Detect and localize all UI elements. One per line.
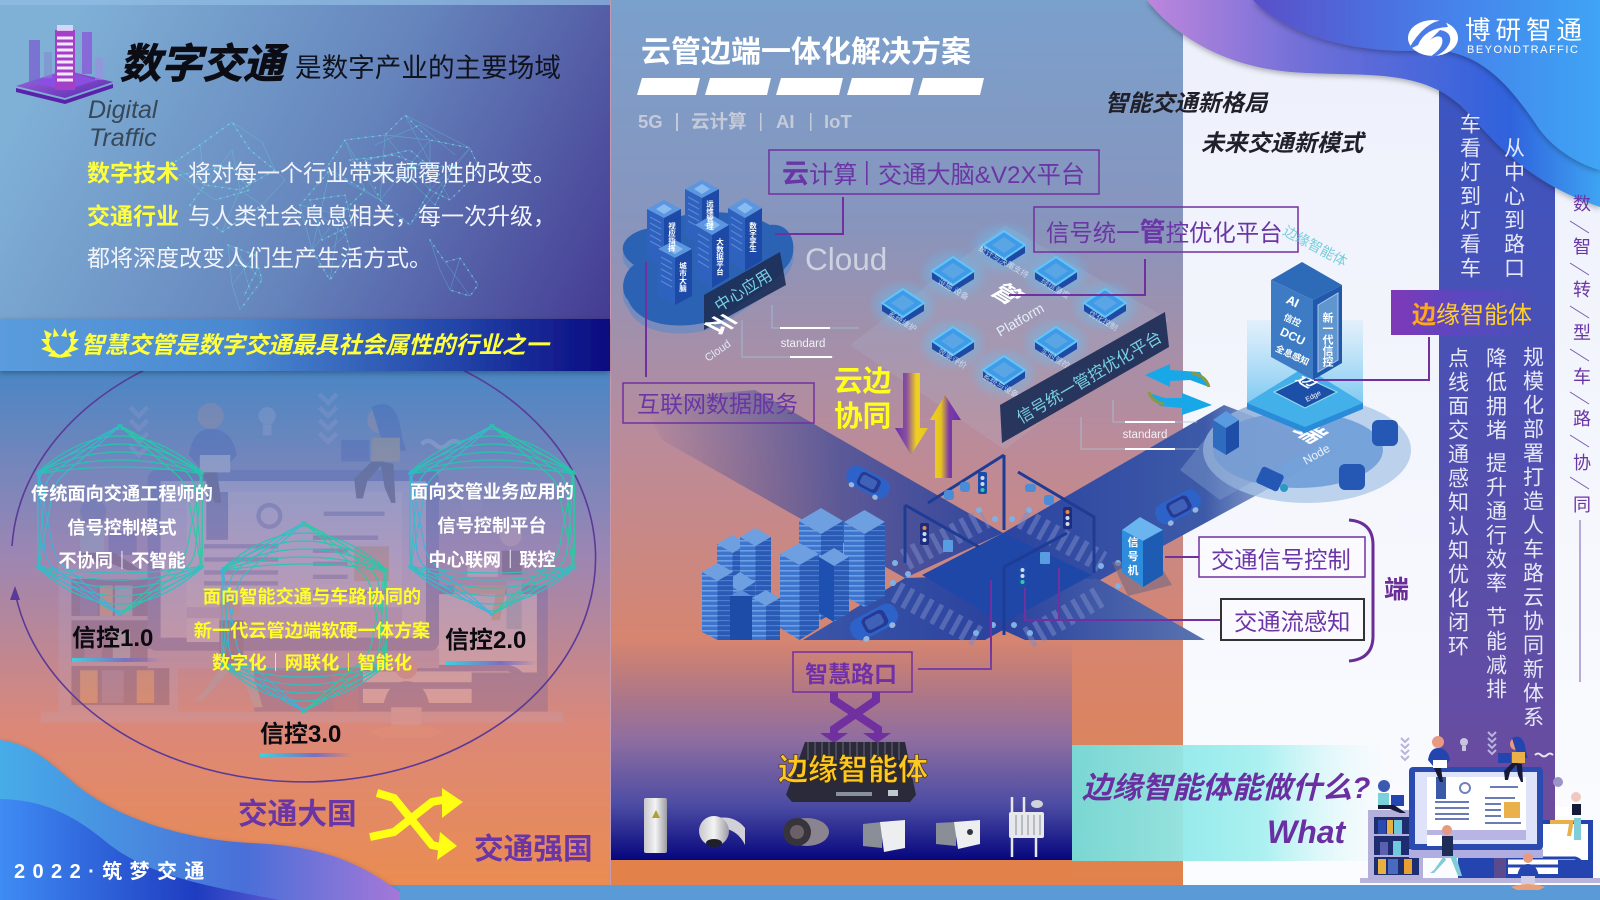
standard link 1: standard	[781, 338, 825, 350]
panel: edge hardware	[611, 640, 1072, 860]
cloud group: 运维管理	[705, 200, 714, 230]
box: cloud computing: 云计算	[782, 159, 857, 189]
platform layer: 绿信量度	[1039, 276, 1072, 301]
standard link 2: standard	[1123, 429, 1167, 441]
label: edge agent: 边缘智能体	[1412, 302, 1532, 329]
person right	[1550, 792, 1581, 840]
person top right	[1498, 737, 1528, 782]
english subtitle: Traffic	[89, 124, 157, 152]
center app panel	[704, 252, 786, 330]
evolution cycle arrow	[10, 334, 596, 782]
stage 2 text: 中心联网｜联控	[428, 549, 556, 570]
heading: cloud-edge solution	[637, 36, 984, 132]
edge box: 边缘智能体	[778, 754, 928, 787]
platform layer: 效果评价	[936, 346, 969, 371]
standard link 1	[742, 305, 859, 357]
logo text: 博研智通	[1465, 17, 1587, 45]
panel: strategy column	[1439, 60, 1555, 824]
person walking	[1427, 825, 1462, 876]
chip plate	[1247, 367, 1363, 433]
hex rings	[0, 402, 613, 735]
logo: BEYONDTRAFFIC	[1467, 44, 1579, 56]
side text: digital transformation: 转	[1573, 280, 1591, 300]
cycle arrows	[1145, 364, 1212, 415]
teal question banner	[1072, 745, 1392, 861]
stage 1 text: 传统面向交通工程师的	[31, 483, 213, 504]
side text: digital transformation: 路	[1573, 409, 1591, 429]
stage 3 text: 面向智能交通与车路协同的	[203, 586, 421, 607]
platform layer	[850, 225, 1170, 450]
banner: slogan	[0, 319, 610, 371]
illustration: people and monitor	[1360, 732, 1600, 890]
side text: digital transformation: 同	[1573, 495, 1591, 515]
column text: upper: 从中心到路口	[1502, 137, 1525, 281]
column text: lower	[1446, 346, 1544, 730]
title: digital traffic: 是数字产业的主要场域	[295, 53, 561, 83]
device: box panel	[936, 820, 980, 849]
standard link 2	[1081, 400, 1199, 449]
edge device illustration: DCU	[1278, 325, 1307, 348]
text: transport power: 交通强国	[474, 833, 593, 866]
column text: lower: 点线面交通感知认知优化闭环	[1446, 347, 1469, 659]
platform layer: 统计与决策支持	[977, 243, 1030, 280]
stage 3 text: 新一代云管边端软硬一体方案	[194, 620, 430, 641]
side text: digital transformation: 数	[1573, 194, 1591, 214]
right white panel background	[1183, 0, 1600, 885]
device: antenna router	[1009, 797, 1044, 857]
wave: top right	[1147, 0, 1600, 207]
intro text: 交通行业	[87, 203, 179, 229]
box: internet data service: 互联网数据服务	[637, 391, 798, 417]
panel: cloud-edge solution background	[611, 0, 1183, 885]
bottom-left wave	[0, 740, 410, 900]
cloud group: 大数据平台	[715, 237, 724, 277]
title: digital traffic: 数字交通	[120, 41, 289, 87]
platform layer: 系统与设备接入	[981, 371, 1034, 408]
label: signal control 2.0: 信控2.0	[445, 627, 526, 654]
label: edge agent	[1314, 290, 1532, 380]
servers	[685, 180, 719, 245]
stage 1 text	[31, 483, 213, 571]
edge device illustration: 新一代信控	[1321, 311, 1334, 367]
text: right panel slogans: 智能交通新格局	[1105, 90, 1269, 116]
cloud text: Cloud	[805, 241, 887, 277]
tech tags	[638, 111, 852, 132]
box: traffic signal control: 交通信号控制	[1211, 547, 1351, 573]
device: dome camera	[699, 816, 745, 847]
signal controller cabinet: 号	[1128, 550, 1138, 563]
logo mark	[1408, 20, 1458, 58]
stage 2 text	[410, 481, 574, 570]
cars	[842, 462, 1206, 646]
open book right	[1502, 820, 1593, 878]
text: right panel slogans: 未来交通新模式	[1201, 130, 1366, 156]
text: transport power	[238, 798, 593, 866]
text: cloud-edge synergy: 协同	[834, 401, 891, 433]
cloud group: 数字孪生	[748, 221, 758, 252]
monitor	[1409, 767, 1543, 878]
box: smart intersection	[793, 652, 912, 692]
stage 2 text: 信号控制平台	[437, 515, 547, 536]
label: signal control 1.0	[72, 625, 162, 662]
cross arrows	[820, 692, 891, 743]
person top left	[1428, 736, 1450, 782]
label: signal control 3.0: 信控3.0	[260, 721, 341, 748]
edge device box	[1271, 262, 1342, 300]
english subtitle	[88, 96, 159, 152]
faint office illustration	[41, 394, 563, 738]
edge device illustration: 边缘智能体	[1281, 223, 1350, 270]
box: signal platform	[1009, 207, 1298, 295]
bookshelf	[1368, 810, 1423, 880]
panel: digital traffic intro	[0, 0, 610, 320]
edge device illustration: 信控	[1282, 311, 1303, 329]
slogan text: 智慧交管是数字交通最具社会属性的行业之一	[81, 332, 551, 358]
box: signal platform: 信号统一管控优化平台	[1046, 217, 1283, 247]
side text: digital transformation	[1570, 194, 1591, 682]
column text: lower: 降低拥堵	[1484, 347, 1507, 443]
box: cloud computing	[769, 150, 1099, 234]
arrows: cloud-edge synergy	[895, 373, 961, 478]
intro text: 将对每一个行业带来颠覆性的改变。	[188, 160, 556, 186]
cloud group: 视应指挥	[667, 221, 676, 253]
box: traffic flow sensing	[1221, 599, 1364, 640]
signal controller cabinet: 信	[1128, 535, 1138, 549]
edge device illustration: AI	[1284, 292, 1301, 310]
intro text: 数字技术	[87, 160, 179, 186]
panel: lower left evolution background	[0, 370, 610, 885]
traffic lights and poles	[890, 455, 1121, 636]
question text: 边缘智能体能做什么?	[1082, 772, 1370, 805]
stage 2 text: 面向交管业务应用的	[410, 481, 574, 502]
edge device illustration: Edge	[1305, 390, 1322, 404]
tech tags: 云计算	[691, 111, 747, 132]
box: smart intersection: 智慧路口	[805, 661, 897, 687]
platform layer: 优化控制	[1087, 308, 1120, 333]
glow column	[1247, 320, 1363, 405]
decor chevrons and bulb	[1401, 732, 1563, 787]
heading bars	[637, 78, 984, 95]
bracket and terminal label	[1349, 520, 1409, 661]
signal controller cabinet: 机	[1128, 563, 1138, 577]
text: transport power: 交通大国	[238, 798, 357, 831]
column text: lower: 提升通行效率	[1484, 452, 1507, 596]
orange strip under hardware panel	[611, 860, 1072, 885]
side text: digital transformation: 车	[1573, 367, 1591, 387]
platform layer: 设施 设备	[936, 276, 971, 302]
box: internet data service	[623, 262, 814, 423]
device: cabinet	[644, 798, 667, 853]
column text: upper	[1458, 113, 1525, 281]
person on shelf	[1378, 780, 1406, 813]
side text: digital transformation: 型	[1573, 323, 1591, 343]
text: cloud-edge synergy: 云边	[834, 366, 892, 398]
stage 3 text: 数字化｜网联化｜智能化	[212, 652, 412, 673]
stage 1 text: 信号控制模式	[67, 517, 177, 538]
platform layer: 系统维护	[886, 309, 919, 334]
road scene: roads	[640, 390, 1340, 640]
icon: purple city platform	[16, 25, 113, 104]
box: traffic flow sensing: 交通流感知	[1234, 609, 1350, 635]
chips	[974, 226, 1034, 270]
cloud label: 云	[697, 311, 743, 338]
node disc	[1203, 397, 1411, 503]
label: signal control 1.0: 信控1.0	[72, 625, 153, 652]
side text: digital transformation: 协	[1573, 453, 1591, 473]
footer slogan: 2022·筑梦交通	[14, 859, 212, 883]
device: flat panel	[863, 820, 905, 852]
stage 1 text: 不协同｜不智能	[58, 550, 186, 571]
column text: lower: 节能减排	[1484, 606, 1507, 702]
heading: cloud-edge solution: 云管边端一体化解决方案	[641, 36, 971, 69]
column text: upper: 车看灯到灯看车	[1458, 113, 1481, 281]
what text: What	[1267, 814, 1347, 850]
box: cloud computing: 交通大脑&V2X平台	[878, 162, 1085, 189]
bracket and terminal label: 端	[1384, 576, 1409, 604]
platform layer: 实时管控	[1039, 346, 1072, 371]
icon: yellow shuffle arrow	[370, 788, 463, 860]
side text: digital transformation: 智	[1573, 237, 1591, 257]
intro text: 都将深度改变人们生产生活方式。	[87, 245, 432, 271]
tech tags: AI	[776, 111, 794, 132]
platform dark bar	[1000, 312, 1169, 443]
connectors: intersection	[918, 568, 1221, 669]
world network map	[170, 115, 480, 310]
edge device illustration: 端	[1286, 419, 1333, 447]
node boxes	[1213, 411, 1398, 492]
signal controller cabinet	[1112, 517, 1172, 596]
platform layer: 信号统一管控优化平台	[1013, 327, 1165, 427]
cloud group: 城市大脑	[678, 261, 688, 293]
edge device illustration: 边	[1292, 372, 1323, 391]
text: cloud-edge synergy	[834, 366, 892, 433]
stage 3 text	[194, 586, 430, 673]
cloud group: Cloud	[703, 338, 733, 364]
english subtitle: Digital	[88, 96, 159, 124]
device: bullet camera	[783, 818, 829, 846]
box: traffic signal control	[1165, 537, 1365, 577]
edge device illustration: Node	[1300, 441, 1333, 468]
cloud group	[623, 180, 793, 364]
edge device illustration: 全息感知	[1274, 342, 1311, 367]
intro text: 与人类社会息息相关，每一次升级，	[188, 203, 556, 229]
platform label: 管	[983, 280, 1030, 308]
title: digital traffic	[120, 41, 561, 87]
text: right panel slogans	[1105, 90, 1366, 156]
buildings	[702, 508, 885, 640]
edge box	[778, 742, 928, 802]
tech tags: 5G	[638, 111, 663, 132]
column text: lower: 规模化部署打造人车路云协同新体系	[1520, 346, 1544, 730]
bottom bar	[400, 885, 1600, 900]
edge device illustration	[1180, 223, 1411, 503]
person sitting	[1511, 853, 1545, 890]
tech tags: IoT	[824, 111, 852, 132]
label: signal control 3.0	[260, 721, 352, 757]
cloud group: 中心应用	[711, 265, 775, 315]
label: signal control 2.0	[445, 627, 537, 665]
platform layer: Platform	[994, 300, 1047, 340]
crosswalks	[896, 518, 1104, 638]
logo	[1408, 17, 1587, 58]
icon: laurel	[41, 328, 79, 358]
intro text	[87, 160, 556, 271]
